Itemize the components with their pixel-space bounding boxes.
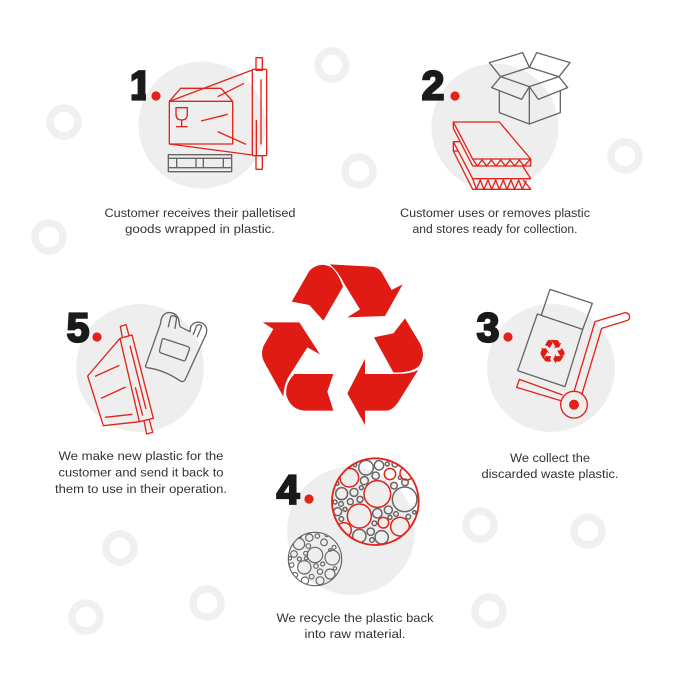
red dot 4: [304, 494, 314, 504]
icon: hand truck with recycling box: [517, 289, 630, 418]
panel: step 3: [477, 289, 630, 481]
central recycling symbol: [262, 264, 423, 425]
background circle 2: [432, 64, 558, 190]
icon: large red pellet circle: [332, 458, 419, 545]
panel: step 5: [55, 304, 227, 496]
background circle 3: [487, 304, 615, 432]
number 2: 2: [422, 62, 444, 108]
caption 3 line 2: discarded waste plastic.: [482, 467, 618, 481]
background circle 5: [76, 304, 204, 432]
red dot 2: [450, 91, 460, 101]
caption 5: We make new plastic for the: [58, 449, 224, 463]
red dot 1: [151, 91, 161, 101]
caption 2 line 2: and stores ready for collection.: [412, 222, 578, 236]
panel: step 2: [400, 53, 590, 236]
caption 1: Customer receives their palletised: [104, 206, 296, 220]
number 5: 5: [67, 304, 89, 350]
number 4: 4: [277, 466, 300, 512]
number 3: 3: [477, 304, 499, 350]
caption 2: Customer uses or removes plastic: [400, 206, 590, 220]
caption 4 line 2: into raw material.: [304, 627, 406, 641]
caption 3: We collect the: [510, 451, 590, 465]
caption 5 line 2: customer and send it back to: [58, 466, 224, 480]
recycling process infographic: [32, 48, 642, 638]
number 1: 1: [129, 62, 152, 108]
panel: step 1: [104, 58, 296, 236]
red dot 5: [92, 332, 102, 342]
caption 4: We recycle the plastic back: [276, 611, 434, 625]
icon: small recycling symbol: [540, 340, 565, 364]
caption 1 line 2: goods wrapped in plastic.: [125, 222, 275, 236]
icon: open cardboard box and flattened sheets: [453, 53, 570, 189]
background circle 4: [287, 467, 415, 595]
panel: step 4: [276, 458, 434, 641]
icon: plastic roll and carrier bag: [88, 313, 207, 434]
red dot 3: [503, 332, 513, 342]
caption 5 line 3: them to use in their operation.: [55, 482, 227, 496]
background circle 1: [138, 62, 266, 188]
icon: small grey pellet circle: [288, 532, 342, 586]
icon: wrapped box on pallet: [168, 58, 267, 172]
